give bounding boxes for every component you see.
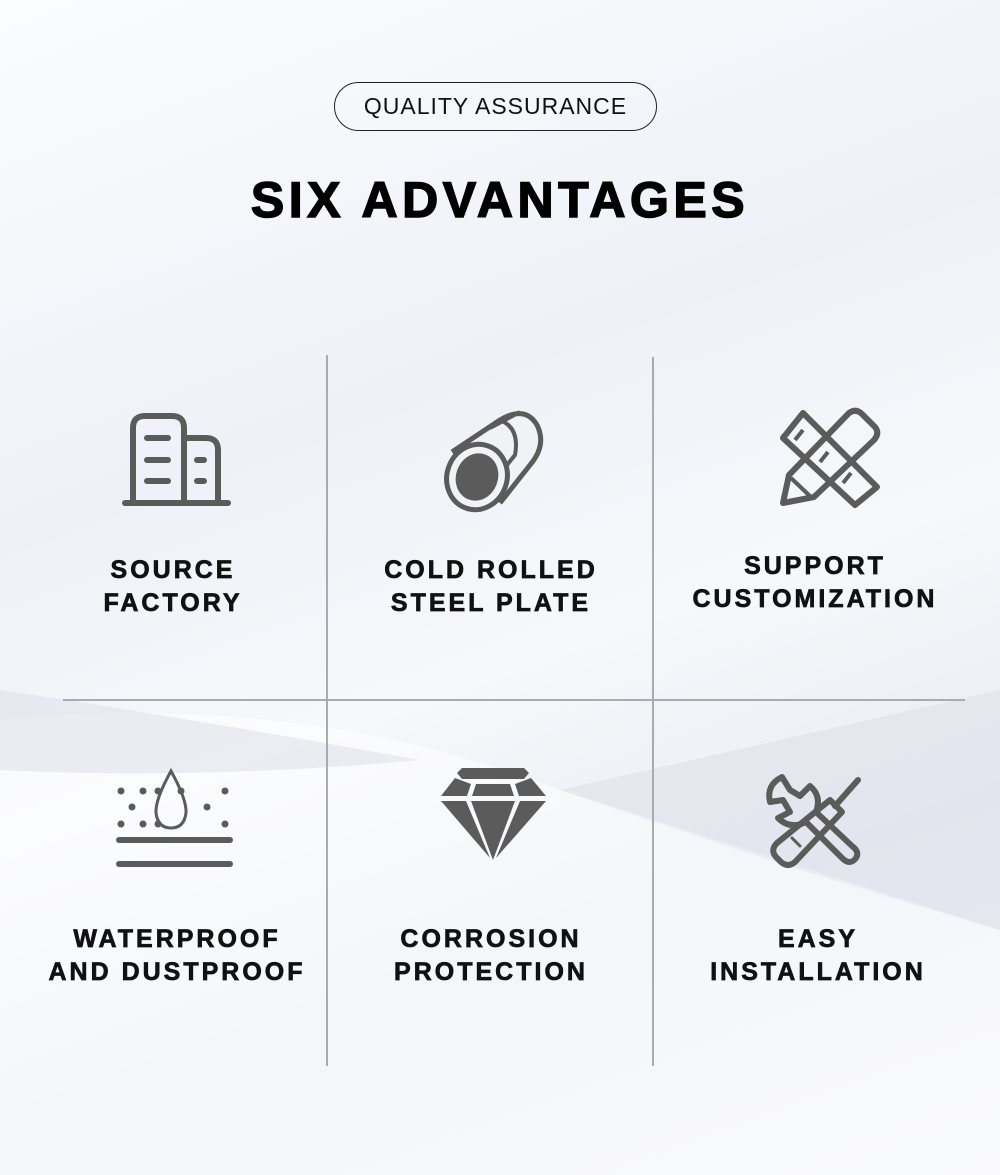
label: source factory: [103, 556, 243, 617]
title: SIX ADVANTAGES: [251, 172, 749, 228]
label: easy installation: EASY: [778, 925, 858, 953]
label: corrosion protection: CORROSION: [400, 925, 582, 953]
icon: wrench and screwdriver: [769, 777, 858, 865]
label: cold rolled steel plate: STEEL PLATE: [391, 589, 591, 617]
label: corrosion protection: PROTECTION: [394, 958, 588, 986]
label: support customization: [692, 552, 938, 613]
icon: steel pipe: [438, 412, 541, 518]
icon: diamond: [441, 768, 546, 860]
label: easy installation: [710, 925, 926, 986]
label: cold rolled steel plate: [384, 556, 598, 617]
label: support customization: SUPPORT: [744, 552, 886, 580]
label: corrosion protection: [394, 925, 588, 986]
badge: quality assurance: QUALITY ASSURANCE: [364, 93, 627, 119]
icon: water drop and dust: [116, 771, 233, 867]
badge: quality assurance: [334, 82, 657, 131]
label: waterproof and dustproof: WATERPROOF: [73, 925, 281, 953]
label: easy installation: INSTALLATION: [710, 958, 926, 986]
label: support customization: CUSTOMIZATION: [692, 585, 938, 613]
label: waterproof and dustproof: [48, 925, 306, 986]
icon: building: [125, 416, 228, 503]
label: cold rolled steel plate: COLD ROLLED: [384, 556, 598, 584]
label: source factory: FACTORY: [103, 589, 243, 617]
label: source factory: SOURCE: [111, 556, 235, 584]
label: waterproof and dustproof: AND DUSTPROOF: [48, 958, 306, 986]
icon: ruler and pencil: [783, 411, 877, 505]
